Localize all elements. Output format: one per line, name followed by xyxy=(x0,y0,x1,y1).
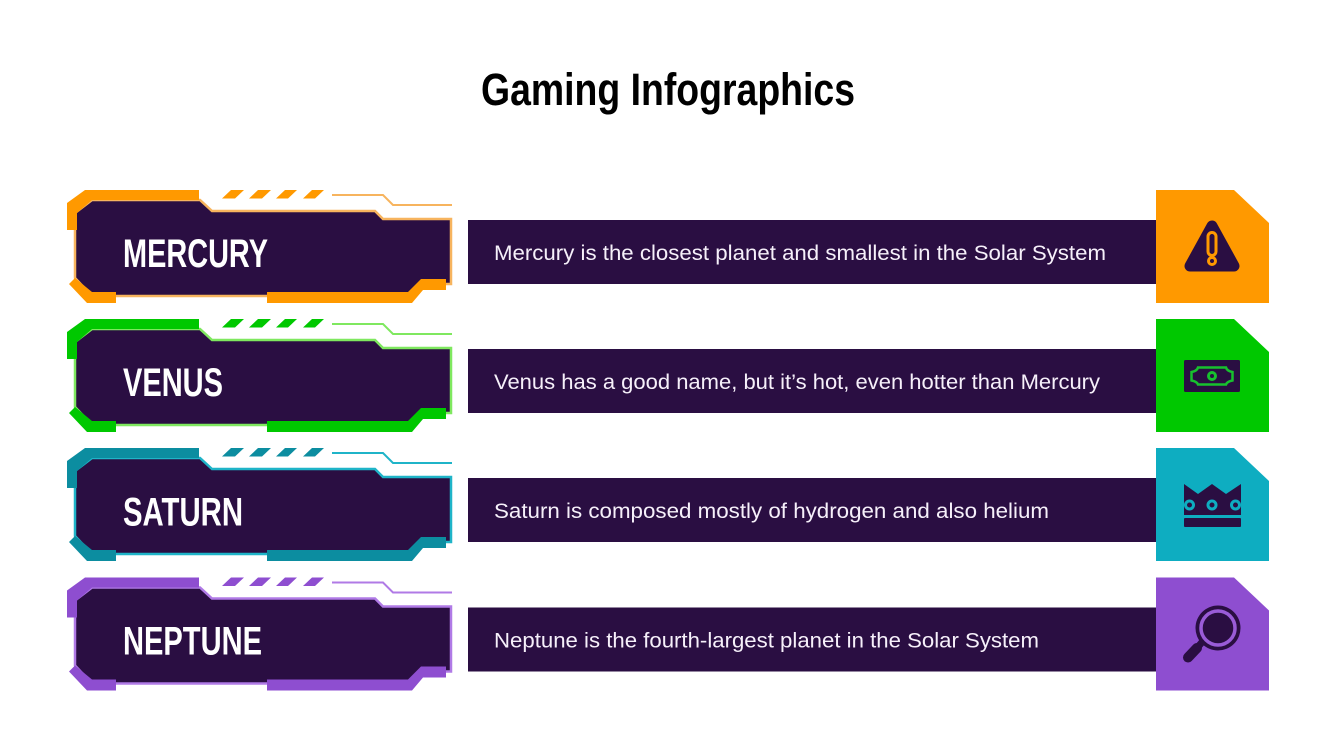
panel: Saturn row xyxy=(67,448,1269,561)
panel: Venus row xyxy=(67,319,1269,432)
label frame: Neptune xyxy=(67,578,452,690)
icon: warning triangle xyxy=(1156,190,1269,303)
label frame: Mercury xyxy=(67,190,452,303)
heading: Venus: VENUS xyxy=(123,361,223,405)
text bar: Mercury: Mercury is the closest planet and smallest in the Solar System xyxy=(494,242,1106,265)
text bar: Mercury xyxy=(468,220,1156,284)
text bar: Neptune: Neptune is the fourth-largest planet in the Solar System xyxy=(494,630,1039,652)
title: Gaming Infographics xyxy=(481,64,855,115)
icon: crown xyxy=(1156,448,1269,561)
text bar: Saturn xyxy=(468,478,1156,542)
panel: Neptune row xyxy=(67,578,1269,690)
label frame: Saturn xyxy=(67,448,452,561)
text bar: Venus: Venus has a good name, but it’s hot, even hotter than Mercury xyxy=(494,371,1101,394)
label frame: Venus xyxy=(67,319,452,432)
heading: Saturn: SATURN xyxy=(123,490,243,534)
heading: Neptune: NEPTUNE xyxy=(123,620,262,664)
text bar: Saturn: Saturn is composed mostly of hydrogen and also helium xyxy=(494,500,1049,523)
icon: banknote xyxy=(1156,319,1269,432)
text bar: Neptune xyxy=(468,608,1156,672)
icon: magnifying glass xyxy=(1156,578,1269,690)
heading: Mercury: MERCURY xyxy=(123,232,268,276)
text bar: Venus xyxy=(468,349,1156,413)
panel: Mercury row xyxy=(67,190,1269,303)
